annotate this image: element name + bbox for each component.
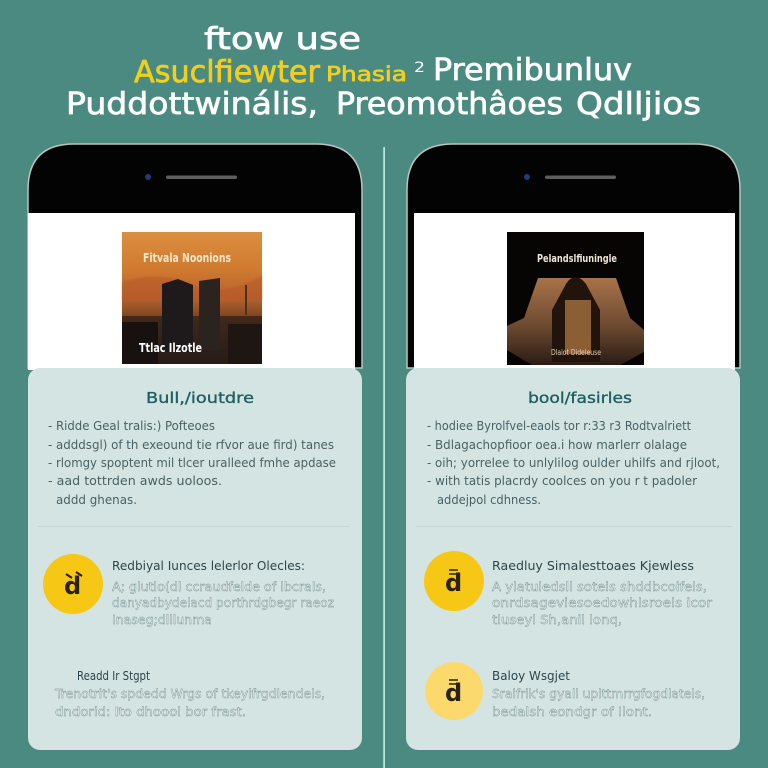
left feature two: Readd Ir Stgpt — [77, 669, 150, 683]
left feature one: danyadbydelacd porthrdgbegr raeoz — [112, 595, 334, 610]
left feature icon — [43, 554, 103, 614]
right feature two — [492, 559, 713, 627]
right feature three: bedalsh eondgr of Ilont. — [492, 704, 652, 719]
right feature two: onrdsageviesoedowhlsroels icor — [492, 595, 713, 610]
right album art: Dlaiot Dideleuse — [551, 348, 601, 357]
left phone speaker — [166, 176, 237, 179]
left feature two: Trenotrit's spdedd Wrgs of tkeylfrgdlendels, — [54, 686, 325, 701]
title: Preomothâoes — [336, 87, 563, 122]
left panel heading: Bull,/ioutdre — [146, 389, 254, 407]
left feature two: dndorid: Ito dhoool bor frast. — [55, 704, 246, 719]
title: Phasia — [326, 62, 407, 86]
title: ftow use — [204, 22, 361, 57]
left bullet list: - aad tottrden awds uoloos. — [48, 473, 222, 488]
right feature two: tluseyl Sh,anil lonq, — [492, 612, 622, 627]
right feature icon two: d — [445, 679, 462, 707]
vertical divider — [383, 147, 385, 768]
left phone camera — [145, 174, 151, 180]
left feature one: Redbiyal Iunces lelerlor Olecles: — [112, 559, 305, 573]
right bullet list: - with tatis placrdy coolces on you r t padoler — [427, 473, 698, 488]
right feature icon two — [425, 662, 483, 720]
right bullet list: - Bdlagachopfioor oea.i how marlerr olalage — [427, 437, 687, 452]
title: Qdlljios — [576, 87, 701, 122]
left feature one: A; glutlo(dl ccraudfelde of lbcrals, — [112, 579, 326, 594]
right feature icon one: d — [445, 569, 462, 597]
left album art: Ttlac Ilzotle — [139, 341, 202, 355]
left album art — [122, 232, 262, 364]
right feature three: Sraifrik's gyali uplttmrrgfogdlatels, — [492, 686, 705, 701]
right bullet list: addejpol cdhness. — [437, 492, 541, 507]
left feature icon: d — [64, 572, 81, 600]
right feature three: Baloy Wsgjet — [492, 669, 570, 683]
left bullet list: - Ridde Geal tralis:) Pofteoes — [48, 418, 215, 433]
left bullet list: - adddsgl) of th exeound tie rfvor aue fird) tanes — [48, 437, 334, 452]
left bullet list: addd ghenas. — [56, 492, 137, 507]
right phone body — [407, 144, 740, 368]
right bullet list: - oih; yorrelee to unlylilog oulder uhilfs and rjloot, — [427, 455, 720, 470]
right phone screen — [414, 213, 735, 370]
right feature two: Raedluy Simalesttoaes Kjewless — [492, 559, 694, 573]
right feature icon one — [424, 551, 484, 611]
right feature two: A ylatuledsll soteis shddbcoifels, — [492, 579, 707, 594]
title: Asuclfiewter — [134, 55, 321, 90]
left phone — [28, 144, 362, 750]
right album art: Pelandslfiuningle — [537, 252, 617, 265]
title: Premibunluv — [433, 53, 632, 88]
left phone body — [28, 144, 362, 368]
left phone screen — [28, 213, 355, 370]
title: 2 — [414, 60, 425, 76]
left album art: Fitvala Noonions — [143, 251, 231, 265]
right feature three — [492, 669, 705, 719]
right phone — [406, 144, 740, 750]
left feature one — [112, 559, 334, 627]
left feature one: Inaseg;dlllunma — [112, 612, 212, 627]
left feature two — [54, 669, 325, 719]
right bullet list — [427, 418, 720, 507]
right album art — [507, 232, 644, 365]
left bullet list: - rlomgy spoptent mil tlcer uralleed fmhe apdase — [48, 455, 336, 470]
left bullet list — [48, 418, 336, 507]
title — [66, 22, 701, 122]
title: Puddottwinális, — [66, 87, 318, 122]
right phone speaker — [545, 176, 616, 179]
right info panel — [406, 368, 740, 750]
right phone camera — [524, 174, 530, 180]
right bullet list: - hodiee Byrolfvel-eaols tor r:33 r3 Rodtvalriett — [427, 418, 691, 433]
right panel heading: bool/fasirles — [528, 389, 632, 407]
left info panel — [28, 368, 362, 750]
